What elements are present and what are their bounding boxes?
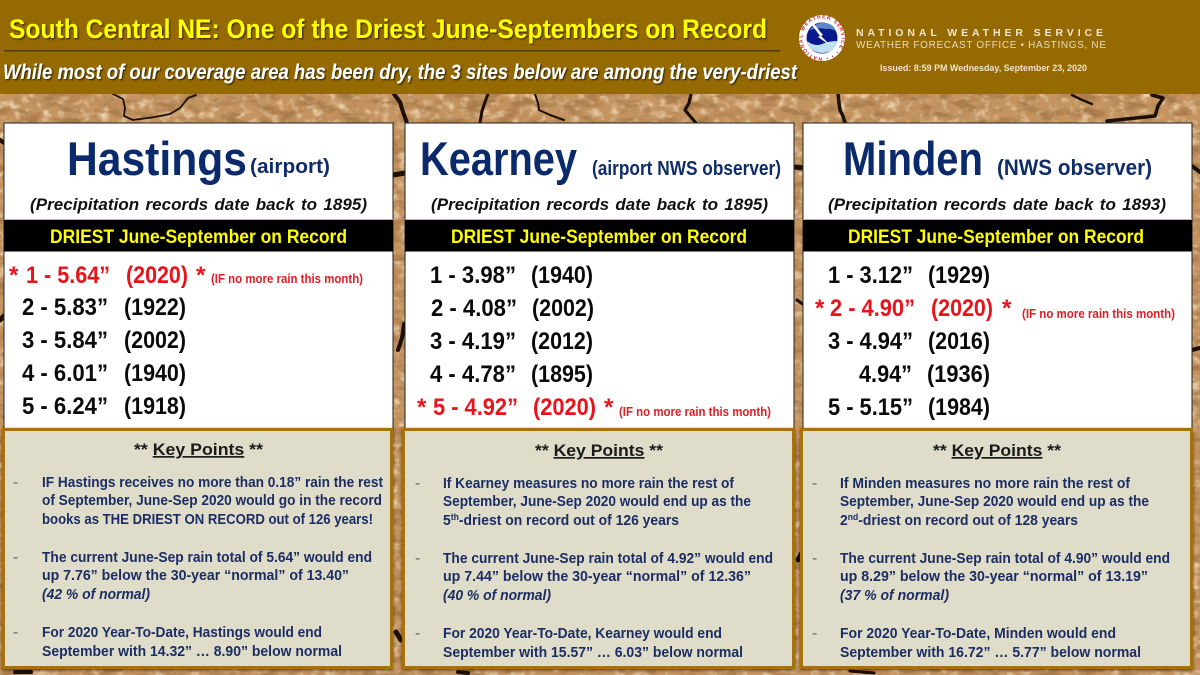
- icon: NWS logo: NATIONAL WEATHER SERVICE • • •: [799, 15, 845, 61]
- ranking list: (1984): [928, 394, 990, 421]
- key point 2: The current June-Sep rain total of 5.64” would end: [42, 550, 372, 566]
- title: South Central NE: One of the Driest June-Septembers on Record: [9, 14, 767, 44]
- key point 1: -: [13, 474, 18, 491]
- ranking list: 4.94”: [859, 361, 912, 388]
- heading: Minden: Minden: [843, 132, 983, 185]
- black bar heading: DRIEST June-September on Record: [848, 227, 1144, 248]
- ranking list: 4 - 4.78”: [430, 361, 516, 388]
- key point 1: nd: [848, 512, 858, 522]
- key point 2: up 7.44” below the 30-year “normal” of 12.36”: [443, 569, 751, 585]
- key point 3: September with 16.72” … 5.77” below normal: [840, 645, 1141, 661]
- key points heading: ** Key Points **: [535, 441, 663, 460]
- key point 1: 2: [840, 513, 848, 529]
- issued time: Issued: 8:59 PM Wednesday, September 23, 2020: [880, 63, 1087, 74]
- heading: Hastings: Hastings: [67, 132, 247, 185]
- ranking list: (2016): [928, 328, 990, 355]
- key point 1: [415, 475, 751, 529]
- key point 3: -: [812, 625, 817, 642]
- panel: Kearney key points: [404, 430, 794, 668]
- ranking list: (1940): [531, 262, 593, 289]
- key point 1: -: [415, 475, 420, 492]
- key point 3: For 2020 Year-To-Date, Hastings would end: [42, 625, 322, 641]
- ranking list: 5 - 6.24”: [22, 393, 108, 420]
- key point 2: [13, 549, 372, 603]
- ranking list: (2002): [124, 327, 186, 354]
- key point 1: September, June-Sep 2020 would end up as the: [840, 494, 1149, 510]
- key point 3: For 2020 Year-To-Date, Kearney would end: [443, 626, 722, 642]
- key point 3: September with 15.57” … 6.03” below normal: [443, 645, 743, 661]
- key points heading: ** Key Points **: [134, 440, 263, 459]
- key point 2: [812, 550, 1170, 604]
- key point 2: The current June-Sep rain total of 4.90” would end: [840, 551, 1170, 567]
- ranking list: (2020): [126, 262, 188, 289]
- ranking list: 5 - 4.92”: [433, 394, 518, 421]
- ranking list: (1895): [531, 361, 593, 388]
- key point 2: (37 % of normal): [840, 588, 949, 604]
- ranking list: 5 - 5.15”: [828, 394, 913, 421]
- key points heading: ** Key Points **: [933, 441, 1061, 460]
- ranking list: 2 - 5.83”: [22, 294, 108, 321]
- records note: (Precipitation records date back to 1895): [30, 195, 367, 214]
- header band: [0, 0, 1200, 94]
- ranking list: (1936): [927, 361, 990, 388]
- key point 3: For 2020 Year-To-Date, Minden would end: [840, 626, 1116, 642]
- subtitle: While most of our coverage area has been dry, the 3 sites below are among the very-driest: [3, 61, 798, 84]
- ranking list: 3 - 4.94”: [828, 328, 913, 355]
- ranking list: (1918): [124, 393, 186, 420]
- NWS office text: [856, 27, 1106, 74]
- key point 1: -driest on record out of 126 years: [459, 513, 679, 529]
- ranking list: (1922): [124, 294, 186, 321]
- ranking list: (2012): [531, 328, 593, 355]
- station note: (NWS observer): [997, 155, 1152, 180]
- ranking list: 1 - 3.12”: [828, 262, 913, 289]
- ranking list: (2020): [931, 295, 993, 322]
- ranking list: (IF no more rain this month): [1022, 306, 1175, 321]
- records note: (Precipitation records date back to 1895): [431, 195, 768, 214]
- key point 3: -: [415, 625, 420, 642]
- ranking list: 1 - 5.64”: [26, 262, 110, 289]
- key point 1: -driest on record out of 128 years: [858, 513, 1078, 529]
- key point 1: [13, 474, 383, 528]
- key point 1: IF Hastings receives no more than 0.18” rain the rest: [42, 475, 383, 491]
- ranking list: *: [9, 262, 19, 289]
- key point 1: of September, June-Sep 2020 would go in the record: [42, 493, 382, 509]
- ranking list: *: [1002, 295, 1012, 322]
- key point 3: [13, 624, 342, 660]
- panel: Minden: [803, 123, 1192, 430]
- ranking list: (2020): [533, 394, 596, 421]
- ranking list: (1940): [124, 360, 186, 387]
- key point 2: -: [415, 550, 420, 567]
- ranking list: *: [604, 394, 614, 421]
- panel: Minden key points: [802, 430, 1192, 668]
- black bar heading: DRIEST June-September on Record: [451, 227, 747, 248]
- key point 2: [415, 550, 773, 604]
- key point 2: (42 % of normal): [42, 587, 150, 603]
- heading: Kearney: Kearney: [420, 132, 577, 185]
- ranking list: 1 - 3.98”: [430, 262, 516, 289]
- key point 2: up 7.76” below the 30-year “normal” of 13.40”: [42, 568, 349, 584]
- key point 2: -: [812, 550, 817, 567]
- key point 3: [415, 625, 743, 661]
- key point 1: 5: [443, 513, 451, 529]
- key point 2: The current June-Sep rain total of 4.92” would end: [443, 551, 773, 567]
- key point 1: th: [451, 512, 459, 522]
- black bar heading: [405, 219, 794, 252]
- ranking list: [815, 262, 1175, 421]
- records note: (Precipitation records date back to 1893): [828, 195, 1166, 214]
- ranking list: [9, 262, 363, 420]
- key point 1: If Kearney measures no more rain the rest of: [443, 476, 734, 492]
- key point 1: September, June-Sep 2020 would end up as the: [443, 494, 751, 510]
- key point 1: -: [812, 475, 817, 492]
- key point 2: up 8.29” below the 30-year “normal” of 13.19”: [840, 569, 1148, 585]
- key point 2: -: [13, 549, 18, 566]
- key point 3: [812, 625, 1141, 661]
- ranking list: 2 - 4.08”: [431, 295, 517, 322]
- panel: Hastings key points: [4, 430, 392, 668]
- ranking list: (2002): [532, 295, 594, 322]
- ranking list: 4 - 6.01”: [22, 360, 108, 387]
- ranking list: (1929): [928, 262, 990, 289]
- ranking list: *: [815, 295, 825, 322]
- black bar heading: [4, 219, 393, 252]
- panel: Kearney: [405, 123, 794, 430]
- key point 1: If Minden measures no more rain the rest of: [840, 476, 1130, 492]
- black bar heading: DRIEST June-September on Record: [50, 227, 347, 248]
- ranking list: *: [417, 394, 427, 421]
- ranking list: 2 - 4.90”: [830, 295, 915, 322]
- black bar heading: [803, 219, 1192, 252]
- panel: Hastings: [4, 123, 393, 430]
- key point 1: books as THE DRIEST ON RECORD out of 126 years!: [42, 512, 373, 528]
- key point 3: September with 14.32” … 8.90” below normal: [42, 644, 342, 660]
- key point 1: [812, 475, 1149, 529]
- station note: (airport): [250, 156, 330, 178]
- station note: (airport NWS observer): [592, 158, 781, 180]
- NWS office text: NATIONAL WEATHER SERVICE: [856, 27, 1103, 39]
- key point 3: -: [13, 624, 18, 641]
- ranking list: [417, 262, 771, 421]
- key point 2: (40 % of normal): [443, 588, 551, 604]
- ranking list: 3 - 4.19”: [430, 328, 516, 355]
- NWS office text: WEATHER FORECAST OFFICE • HASTINGS, NE: [856, 40, 1106, 51]
- ranking list: (IF no more rain this month): [211, 271, 363, 286]
- ranking list: *: [196, 262, 206, 289]
- ranking list: (IF no more rain this month): [619, 404, 771, 419]
- ranking list: 3 - 5.84”: [22, 327, 108, 354]
